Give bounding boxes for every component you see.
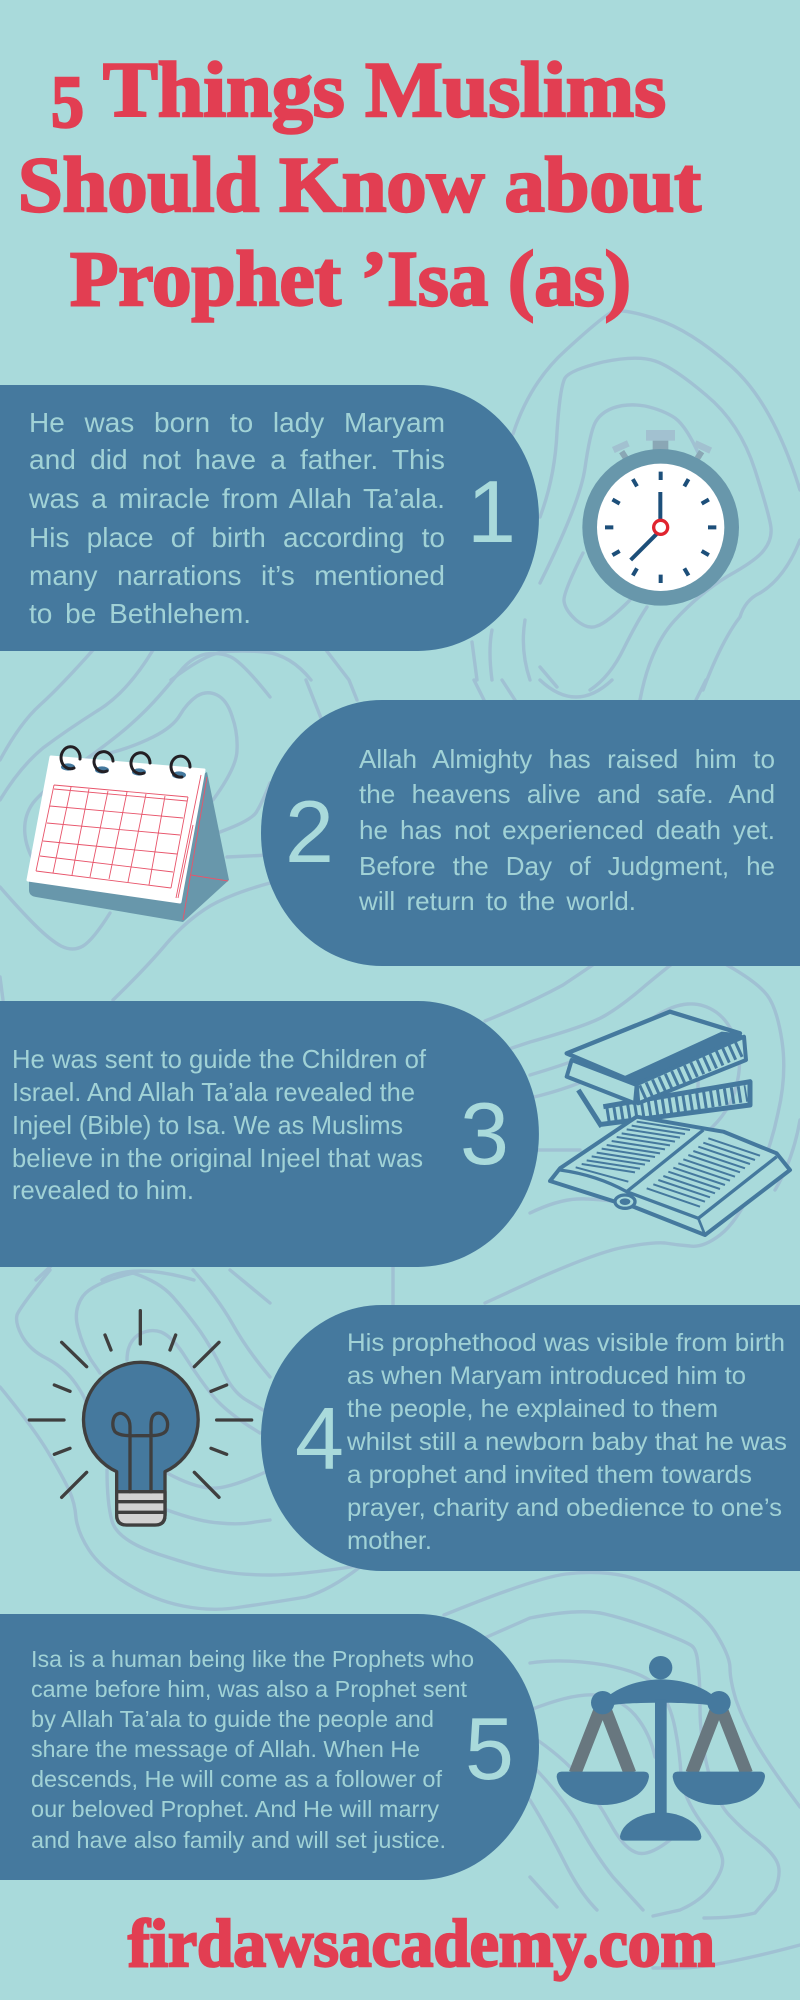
icon: balance scale [557,1656,765,1841]
text: fact 5: by Allah Ta’ala to guide the people and [31,1706,434,1732]
number 2: 2 [285,782,334,881]
title: 5 [51,62,84,144]
text: fact 2: Before the Day of Judgment, he [359,851,775,881]
title: Should Know about [18,141,701,228]
number 1: 1 [467,462,516,561]
upper closed book [567,1012,746,1103]
text: fact 4: mother. [347,1527,432,1555]
text: fact 5: share the message of Allah. When He [31,1736,420,1762]
number 5: 5 [465,1699,514,1798]
text: fact 3: Injeel (Bible) to Isa. We as Muslims [12,1110,403,1140]
text: fact 5: Isa is a human being like the Prophets who [31,1646,474,1672]
text: fact 5: and have also family and will set justice. [31,1827,446,1853]
number 3: 3 [460,1084,509,1183]
text: fact 1: He was born to lady Maryam [29,407,445,438]
text: fact 3 [12,1044,427,1205]
text: fact 3: Israel. And Allah Ta’ala revealed the [12,1077,415,1107]
text: fact 4: whilst still a newborn baby that he was [346,1428,787,1456]
lower closed book [578,1082,750,1127]
panel: fact 5 [0,1614,539,1880]
title: Things Muslims [103,46,666,133]
text: fact 4 [346,1329,787,1555]
text: fact 5: descends, He will come as a follower of [31,1766,443,1792]
panel: fact 1 [0,385,539,651]
text: fact 1: and did not have a father. This [29,444,445,475]
text: fact 4: as when Maryam introduced him to [347,1362,746,1390]
text: fact 1: His place of birth according to [29,522,445,553]
text: fact 4: prayer, charity and obedience to one’s [347,1494,782,1522]
icon: desk calendar [28,747,229,922]
panel: fact 3 [0,1001,539,1267]
text: fact 3: He was sent to guide the Children of [12,1044,427,1074]
open book [550,1117,790,1235]
text: fact 4: a prophet and invited them towards [347,1461,752,1489]
text: fact 3: revealed to him. [12,1175,194,1205]
text: fact 1: was a miracle from Allah Ta’ala. [28,483,445,514]
panel: fact 2 [261,700,800,966]
text: fact 3: believe in the original Injeel that was [12,1143,423,1173]
text: fact 1: to be Bethlehem. [29,598,251,629]
text: fact 1 [28,407,445,629]
number 4: 4 [295,1389,344,1488]
text: fact 4: the people, he explained to them [347,1395,718,1423]
title [18,46,701,322]
text: fact 2: Allah Almighty has raised him to [359,744,775,774]
icon: stopwatch [582,430,739,606]
text: fact 5: came before him, was also a Prophet sent [31,1676,468,1702]
title: Prophet ’Isa (as) [70,235,631,322]
icon: stack of books [550,1012,790,1235]
text: fact 2: he has not experienced death yet. [359,815,775,845]
panel: fact 4 [261,1305,800,1571]
text: fact 5 [31,1646,474,1853]
text: fact 5: our beloved Prophet. And He will marry [31,1796,439,1822]
text: fact 2 [358,744,775,916]
icon: light bulb [29,1311,252,1525]
text: fact 2: will return to the world. [358,886,636,916]
text: fact 1: many narrations it’s mentioned [29,560,445,591]
footer: website: firdawsacademy.com [128,1905,715,1981]
text: fact 4: His prophethood was visible from birth [347,1329,785,1357]
text: fact 2: the heavens alive and safe. And [359,779,775,809]
